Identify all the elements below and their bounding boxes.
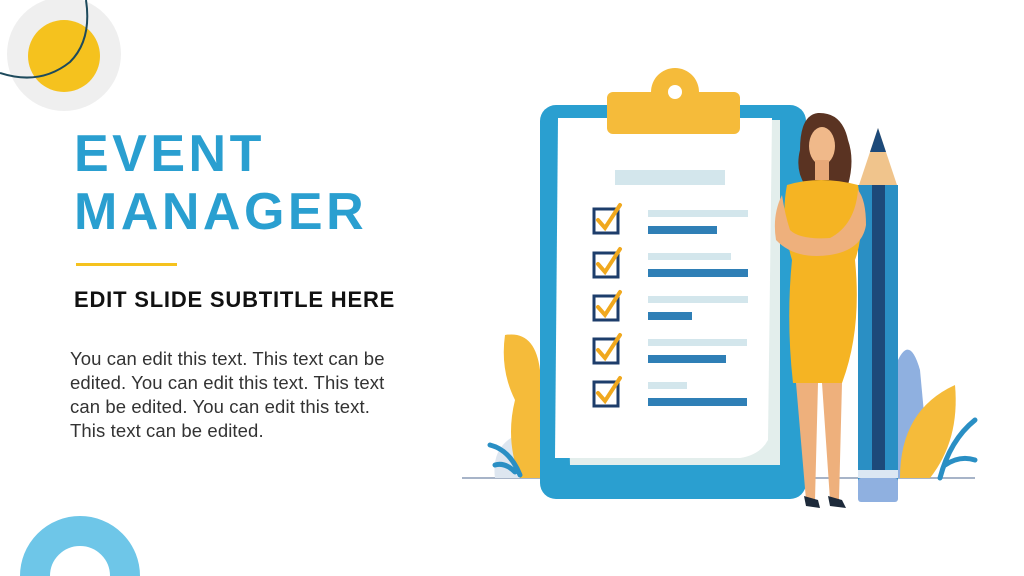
title underline — [76, 263, 177, 266]
body text: edited. You can edit this text. This text — [70, 372, 384, 393]
title: MANAGER — [74, 183, 367, 241]
pencil — [858, 128, 898, 502]
plants right — [898, 350, 975, 478]
body text — [70, 348, 385, 441]
title: EVENT — [74, 125, 265, 183]
subtitle: EDIT SLIDE SUBTITLE HERE — [74, 287, 395, 312]
body text: can be edited. You can edit this text. — [70, 396, 370, 417]
clipboard — [540, 68, 806, 499]
woman — [775, 113, 866, 508]
title — [74, 125, 367, 241]
plants left — [490, 334, 540, 478]
body text: You can edit this text. This text can be — [70, 348, 385, 369]
decoration: top-left circles — [0, 0, 121, 111]
decoration: bottom-left ring — [20, 516, 140, 576]
body text: This text can be edited. — [70, 420, 264, 441]
ground line — [462, 477, 975, 479]
